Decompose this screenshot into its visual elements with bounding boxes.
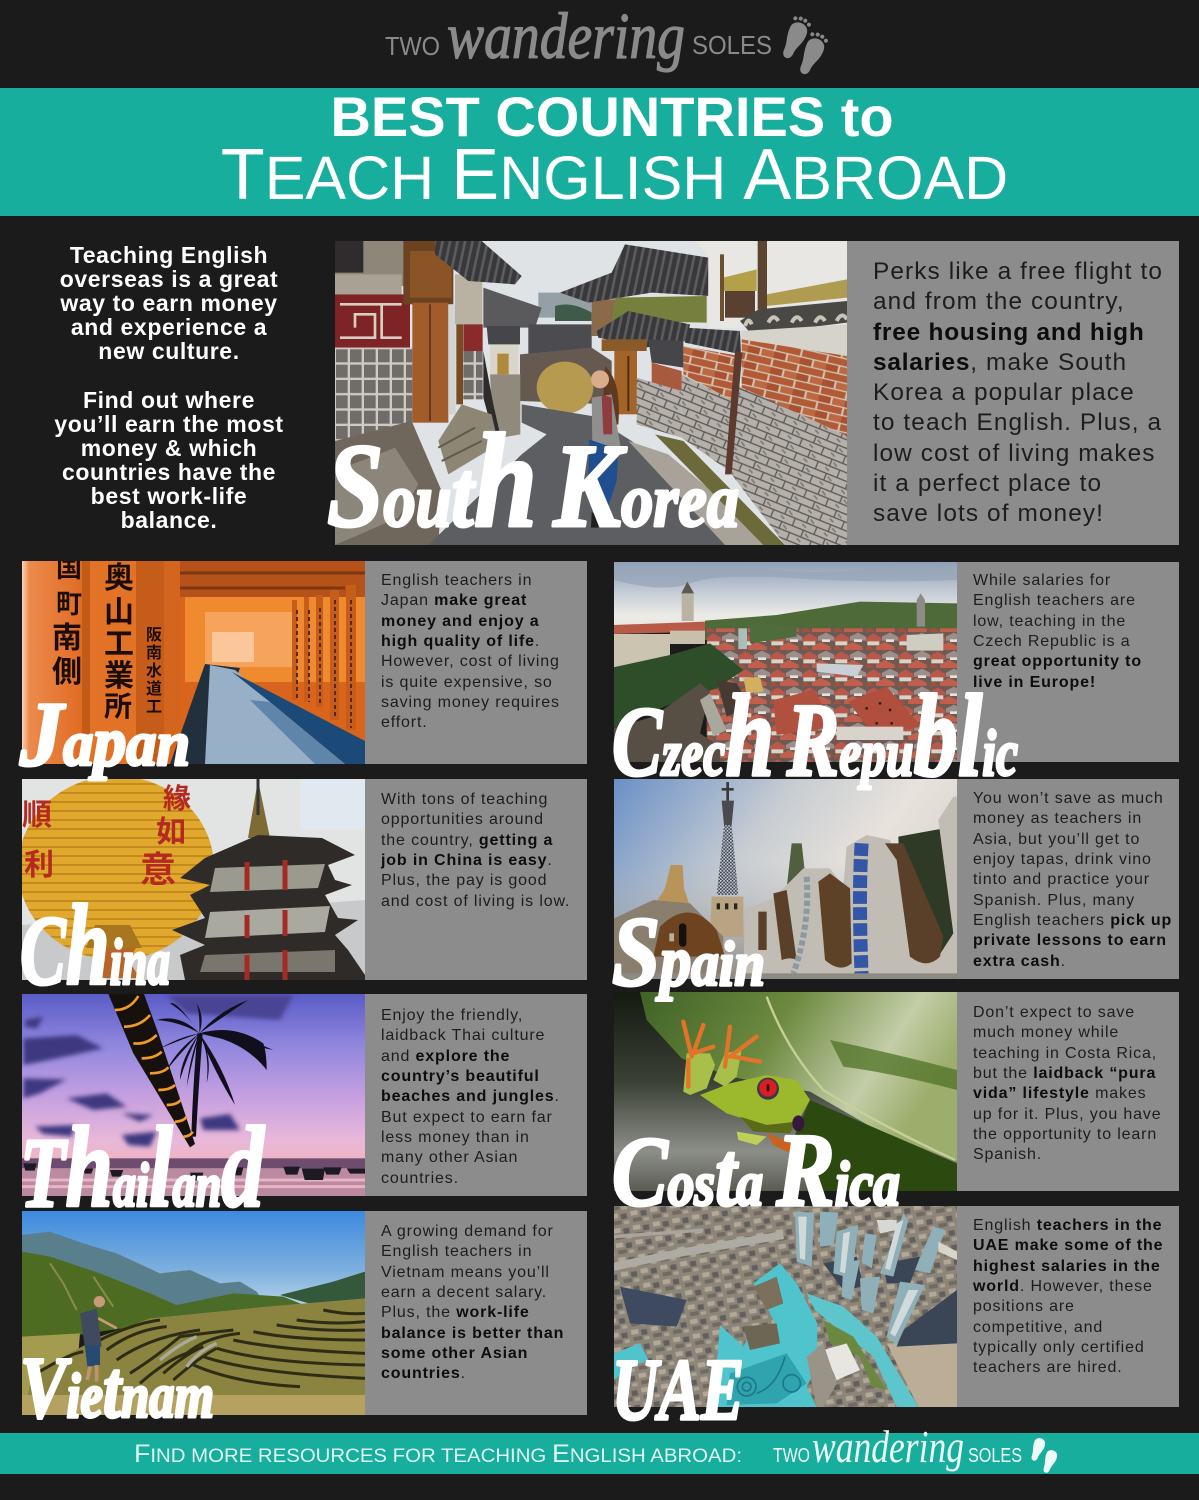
panel: Czech Republic <box>614 562 1179 762</box>
description: Spanish. Plus, many <box>973 892 1135 909</box>
description: Don’t expect to save <box>973 1004 1135 1021</box>
photo: torii gate tunnel: 所 <box>104 685 132 725</box>
panel: China <box>22 779 587 980</box>
description: and cost of living is low. <box>381 893 570 910</box>
description: Korea a popular place <box>873 379 1135 406</box>
title: UAE: UAE <box>612 1342 744 1439</box>
title: Spain: Spain <box>612 896 765 1007</box>
description: great opportunity to <box>973 653 1142 670</box>
description: it a perfect place to <box>873 470 1102 497</box>
intro text: new culture. <box>98 338 240 364</box>
description: tinto and practice your <box>973 871 1150 888</box>
panel: Vietnam <box>22 1211 587 1415</box>
intro text: money & which <box>81 435 257 461</box>
description: positions are <box>973 1298 1075 1315</box>
photo: lantern and pagoda: 順 <box>22 790 52 834</box>
description: Asia, but you’ll get to <box>973 831 1140 848</box>
description: A growing demand for <box>381 1223 554 1240</box>
photo: Park Guell <box>614 779 957 979</box>
footer logo: TWO <box>773 1445 810 1467</box>
panel: Spain <box>614 779 1179 979</box>
description <box>365 1211 587 1415</box>
photo: rice terraces <box>22 1211 365 1415</box>
description: But expect to earn far <box>381 1109 553 1126</box>
description: money as teachers in <box>973 810 1142 827</box>
description: money and enjoy a <box>381 613 540 630</box>
description: the opportunity to learn <box>973 1126 1157 1143</box>
photo: red-eyed tree frog <box>614 992 957 1191</box>
description: English teachers are <box>973 592 1136 609</box>
photo: torii gate tunnel: 阪 <box>146 621 162 645</box>
header logo: Two Wandering Soles <box>385 8 828 74</box>
photo: torii gate tunnel: 山 <box>104 587 134 631</box>
title: Costa Rica: Costa Rica <box>612 1111 900 1228</box>
description: some other Asian <box>381 1345 528 1362</box>
description: You won’t save as much <box>973 790 1164 807</box>
description: balance is better than <box>381 1325 564 1342</box>
photo: torii gate tunnel: 南 <box>52 613 82 657</box>
description: but the laidback “pura <box>973 1065 1156 1082</box>
description: English teachers in <box>381 572 532 589</box>
footer logo: SOLES <box>968 1445 1022 1467</box>
panel: Thailand <box>22 994 587 1196</box>
description <box>957 992 1179 1191</box>
description: With tons of teaching <box>381 791 548 808</box>
description: English teachers pick up <box>973 912 1172 929</box>
footer banner <box>0 1433 1199 1474</box>
photo: torii gate tunnel: 工 <box>146 693 162 717</box>
description: to teach English. Plus, a <box>873 409 1162 436</box>
title banner <box>0 88 1199 216</box>
header logo: Two Wandering Soles: SOLES <box>692 30 772 60</box>
intro text <box>54 242 284 533</box>
description: salaries, make South <box>873 349 1127 376</box>
description: English teachers in the <box>973 1217 1162 1234</box>
description: However, cost of living <box>381 653 560 670</box>
intro text: Find out where <box>83 387 255 413</box>
photo: lantern and pagoda: 意 <box>140 841 176 893</box>
description: effort. <box>381 714 428 731</box>
description <box>365 994 587 1196</box>
panel: South Korea <box>335 241 1179 545</box>
description: countries. <box>381 1170 459 1187</box>
description: low, teaching in the <box>973 613 1126 630</box>
description: typically only certified <box>973 1339 1145 1356</box>
photo: torii gate tunnel: 南 <box>146 639 162 663</box>
description: Plus, the work-life <box>381 1304 530 1321</box>
description: up for it. Plus, you have <box>973 1106 1161 1123</box>
description: and from the country, <box>873 288 1125 315</box>
description: free housing and high <box>873 319 1145 346</box>
footer logo: wandering <box>812 1421 964 1472</box>
intro text: you’ll earn the most <box>54 411 284 437</box>
photo: Korean hanok alley <box>335 241 847 545</box>
photo: torii gate tunnel: 水 <box>146 657 162 681</box>
description: live in Europe! <box>973 674 1096 691</box>
description: While salaries for <box>973 572 1111 589</box>
title: Czech Republic: Czech Republic <box>612 670 1018 801</box>
title: South Korea: South Korea <box>327 407 739 556</box>
description: Japan make great <box>381 592 527 609</box>
description: laidback Thai culture <box>381 1027 545 1044</box>
photo: palm tree at sunset <box>22 994 365 1196</box>
description: much money while <box>973 1024 1119 1041</box>
description: low cost of living makes <box>873 440 1156 467</box>
panel: UAE <box>614 1206 1179 1407</box>
intro text: balance. <box>121 507 217 533</box>
description: countries. <box>381 1365 466 1382</box>
description: Vietnam means you’ll <box>381 1264 550 1281</box>
title: Vietnam: Vietnam <box>20 1340 214 1437</box>
description: world. However, these <box>973 1278 1153 1295</box>
description <box>957 779 1179 979</box>
description: less money than in <box>381 1129 530 1146</box>
description <box>847 241 1179 545</box>
title line 2: TEACH ENGLISH ABROAD <box>221 135 1008 215</box>
description: extra cash. <box>973 953 1066 970</box>
photo: lantern and pagoda: 如 <box>156 807 186 851</box>
intro text: overseas is a great <box>60 266 278 292</box>
photo: Cesky Krumlov rooftops <box>614 562 957 762</box>
description: high quality of life. <box>381 633 540 650</box>
description: teaching in Costa Rica, <box>973 1045 1157 1062</box>
description: the country, getting a <box>381 832 553 849</box>
description: UAE make some of the <box>973 1237 1163 1254</box>
description <box>365 561 587 764</box>
title: Japan: Japan <box>19 683 190 785</box>
photo: torii gate tunnel: 工 <box>104 619 134 663</box>
description: earn a decent salary. <box>381 1284 547 1301</box>
description: teachers are hired. <box>973 1359 1123 1376</box>
photo: torii gate tunnel: 業 <box>104 651 134 695</box>
description: beaches and jungles. <box>381 1088 560 1105</box>
photo: lantern and pagoda <box>22 779 365 980</box>
description: Enjoy the friendly, <box>381 1007 523 1024</box>
title: China: China <box>20 882 170 1009</box>
panel: Costa Rica <box>614 992 1179 1191</box>
photo: torii gate tunnel <box>22 561 365 764</box>
header logo: Two Wandering Soles: TWO <box>385 31 440 61</box>
description: is quite expensive, so <box>381 674 553 691</box>
description: country’s beautiful <box>381 1068 540 1085</box>
description: save lots of money! <box>873 500 1104 527</box>
intro text: Teaching English <box>70 242 268 268</box>
intro text: countries have the <box>62 459 276 485</box>
description: and explore the <box>381 1048 510 1065</box>
description: Czech Republic is a <box>973 633 1131 650</box>
description <box>365 779 587 980</box>
title: Thailand: Thailand <box>20 1104 265 1231</box>
description: saving money requires <box>381 694 560 711</box>
intro text: best work-life <box>91 483 247 509</box>
description: Perks like a free flight to <box>873 258 1163 285</box>
photo: Dubai aerial <box>614 1206 957 1407</box>
panel: Japan <box>22 561 587 764</box>
intro text: and experience a <box>71 314 267 340</box>
description: competitive, and <box>973 1319 1103 1336</box>
description: opportunities around <box>381 811 544 828</box>
description: Plus, the pay is good <box>381 872 547 889</box>
description <box>957 562 1179 762</box>
description: enjoy tapas, drink vino <box>973 851 1152 868</box>
description: many other Asian <box>381 1149 518 1166</box>
description: Spanish. <box>973 1146 1042 1163</box>
title line 1: BEST COUNTRIES to <box>330 85 894 148</box>
description <box>957 1206 1179 1407</box>
photo: lantern and pagoda: 利 <box>24 840 54 884</box>
photo: torii gate tunnel: 道 <box>146 675 162 699</box>
footer logo <box>773 1421 1058 1473</box>
description: highest salaries in the <box>973 1258 1161 1275</box>
photo: torii gate tunnel: 側 <box>52 647 82 691</box>
description: vida” lifestyle makes <box>973 1085 1146 1102</box>
footer text: FIND MORE RESOURCES FOR TEACHING ENGLISH ABROAD: <box>134 1440 742 1468</box>
description: English teachers in <box>381 1243 532 1260</box>
intro text: way to earn money <box>60 290 278 316</box>
description: job in China is easy. <box>381 852 553 869</box>
description: private lessons to earn <box>973 932 1167 949</box>
photo: torii gate tunnel: 町 <box>56 584 82 621</box>
